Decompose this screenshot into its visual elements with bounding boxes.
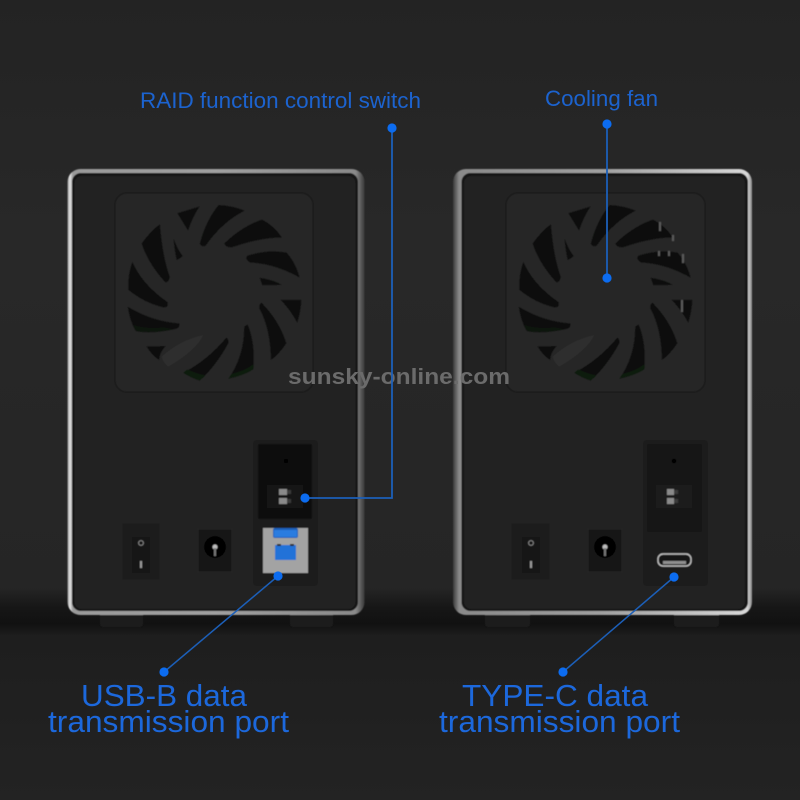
callout: TYPE-C data transmission port: transmission port [439,704,680,739]
RAID and port recess [642,439,709,587]
fan plate [506,193,705,392]
feet [485,612,719,627]
device: right enclosure with Type-C port [453,169,752,627]
fan slots [518,204,693,382]
feet [100,612,333,627]
fan plate [115,193,313,392]
fan slots [127,204,302,382]
callout: TYPE-C data transmission port: TYPE-C data [462,678,649,713]
silver frame [453,169,752,615]
callout: USB-B data transmission port: transmission port [48,704,289,739]
DC power jack [588,529,622,572]
power switch [122,523,160,580]
silver frame [68,169,364,615]
callout: TYPE-C data transmission port [439,572,680,739]
device: left enclosure with USB-B port [68,169,364,627]
callout: USB-B data transmission port: USB-B data [81,678,248,713]
back plate [72,173,358,611]
USB-B port [263,528,308,573]
callout: USB-B data transmission port [48,571,289,739]
watermark: sunsky-online.com [288,364,510,389]
power switch [511,523,550,580]
RAID and port recess [252,439,319,587]
DC power jack [198,529,232,572]
callout: Cooling fan: Cooling fan [545,86,658,111]
callout: RAID function control switch [140,88,421,503]
callout: Cooling fan [545,86,658,283]
internal parts visible through fan [658,222,684,312]
back plate [462,173,748,611]
callout: RAID function control switch: RAID function control switch [140,88,421,113]
Type-C port [658,554,691,566]
